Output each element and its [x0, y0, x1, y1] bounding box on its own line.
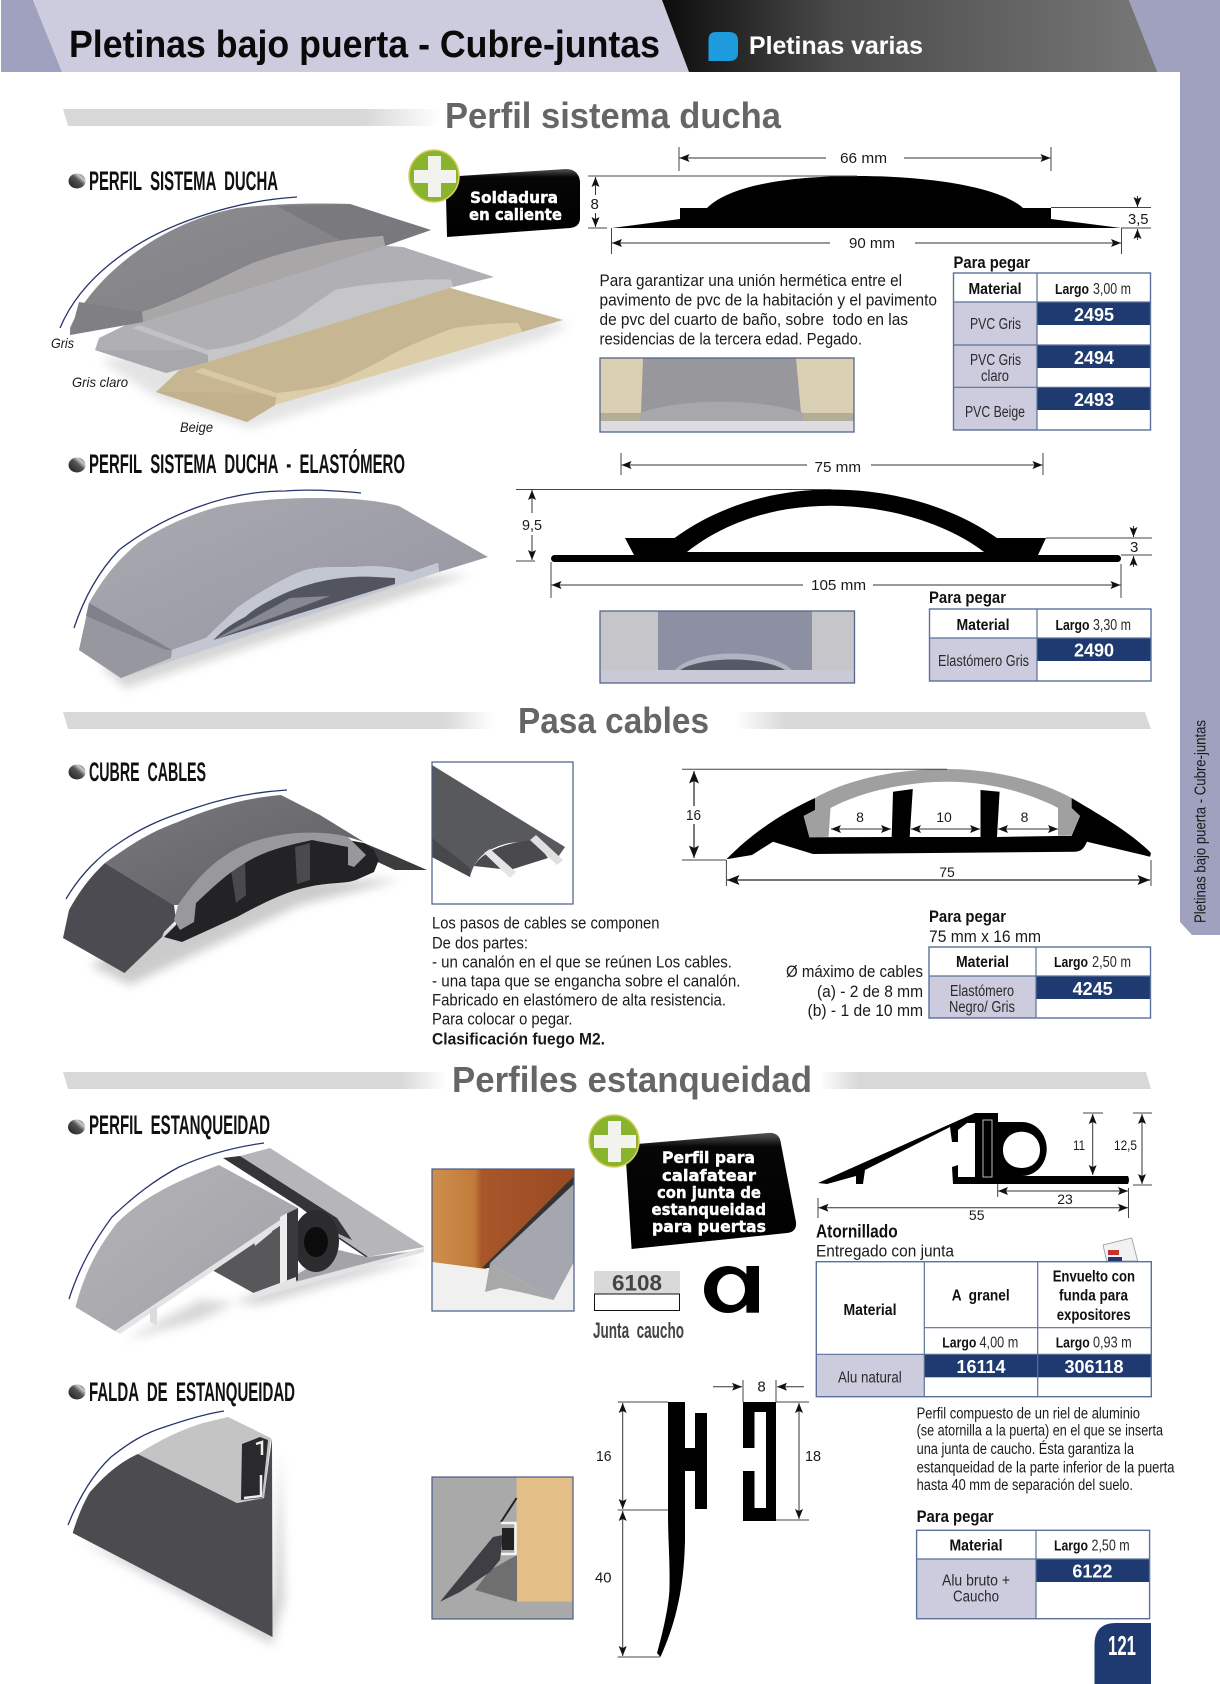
description text: estanqueidad: hasta 40 mm de separación del suelo. [917, 1477, 1133, 1494]
table: cubre cables reference: Elastómero [950, 983, 1014, 1000]
description text: cubre cables: Fabricado en elastómero de alta resistencia. [432, 992, 726, 1010]
table: cubre cables reference [929, 947, 1150, 1018]
description text: ducha: Para garantizar una unión hermética entre el [600, 272, 902, 290]
heading: Para pegar: Para pegar [929, 588, 1006, 607]
heading: Para pegar: Para pegar [917, 1507, 994, 1526]
technical drawing: ducha profile: 66 mm [840, 150, 887, 167]
table: falda reference: Material [950, 1538, 1002, 1555]
photo: ducha installed [600, 358, 854, 432]
table: falda reference: 6122 [1072, 1561, 1112, 1581]
table: cubre cables reference: Material [956, 954, 1009, 971]
main title: Pletinas bajo puerta - Cubre-juntas [69, 24, 660, 66]
section heading: Perfiles estanqueidad: Perfiles estanqueidad [452, 1059, 812, 1100]
description text: estanqueidad: Perfil compuesto de un riel de aluminio [917, 1405, 1140, 1422]
table: ducha references: PVC Gris [970, 352, 1021, 369]
section heading: Perfil sistema ducha: Perfil sistema ducha [445, 95, 782, 136]
table: perfil estanqueidad references: funda para [1059, 1288, 1128, 1305]
junta reference 6108: 6108 [612, 1271, 662, 1296]
heading: Para pegar [929, 907, 1041, 946]
table: falda reference: Caucho [953, 1589, 999, 1606]
heading: Perfil estanqueidad [68, 1110, 270, 1140]
heading: Perfil estanqueidad: PERFIL ESTANQUEIDAD [89, 1110, 270, 1140]
technical drawing: door seal profile: 55 [969, 1207, 985, 1223]
table: elastómero references: Largo [1056, 617, 1090, 634]
callout: perfil para calafatear: calafatear [662, 1166, 756, 1185]
description text: cubre cables: - una tapa que se engancha sobre el canalón. [432, 973, 740, 991]
table: perfil estanqueidad references: Envuelto con [1053, 1269, 1135, 1286]
heading: Cubre cables [68, 757, 206, 787]
technical drawing: falda profile: 18 [805, 1448, 821, 1465]
table: perfil estanqueidad references: Largo [942, 1335, 976, 1352]
technical drawing: ducha profile: 3,5 [1128, 211, 1148, 228]
product illustration: cubre cables [63, 790, 427, 985]
description text: ducha [600, 272, 937, 348]
heading: Perfil sistema ducha: PERFIL SISTEMA DUCHA [89, 166, 278, 196]
icon: junta section symbol [704, 1266, 759, 1313]
table: cubre cables reference: Largo [1054, 954, 1088, 971]
callout: soldadura en caliente [409, 150, 580, 237]
table: elastómero references: 2490 [1074, 641, 1114, 661]
table: perfil estanqueidad references: 16114 [956, 1357, 1006, 1377]
icon: blue category tab [708, 32, 738, 61]
heading: Cubre cables: CUBRE CABLES [89, 757, 206, 787]
product illustration: perfil estanqueidad [69, 1143, 425, 1340]
technical drawing: elastómero profile: 105 mm [811, 577, 866, 594]
heading: Perfil sistema ducha - elastómero [68, 448, 405, 479]
heading: Para pegar: Para pegar [929, 907, 1006, 926]
technical drawing: door seal profile: 12,5 [1114, 1137, 1137, 1153]
table: perfil estanqueidad references: 0,93 m [1093, 1335, 1132, 1352]
table: perfil estanqueidad references: Largo [1056, 1335, 1090, 1352]
category label: Pletinas varias [749, 32, 923, 60]
table: perfil estanqueidad references: 306118 [1064, 1357, 1124, 1377]
table: perfil estanqueidad references: Alu natural [838, 1370, 902, 1387]
technical drawing: cable cover profile: 8 [856, 809, 864, 825]
heading: Falda de estanqueidad: FALDA DE ESTANQUEIDAD [89, 1377, 295, 1407]
heading: Para pegar: 75 mm x 16 mm [929, 928, 1041, 946]
label: Gris claro: Gris claro [72, 374, 128, 390]
callout: soldadura en caliente: Soldadura [470, 188, 558, 207]
icon: display package [1103, 1238, 1138, 1261]
technical drawing: elastómero profile [516, 453, 1152, 598]
technical drawing: falda profile: 16 [596, 1448, 612, 1465]
description text: cubre cables: Para colocar o pegar. [432, 1010, 572, 1028]
heading: Perfil sistema ducha - elastómero: PERFIL SISTEMA DUCHA - ELASTÓMERO [89, 448, 405, 479]
table: ducha references: claro [981, 368, 1009, 385]
description text: estanqueidad: (se atornilla a la puerta) en el que se inserta [917, 1423, 1163, 1440]
product illustration: falda de estanqueidad [68, 1411, 285, 1645]
description text: cubre cables: Clasificación fuego M2. [432, 1030, 605, 1048]
label: Junta caucho: Junta caucho [593, 1318, 684, 1343]
callout: perfil para calafatear [589, 1115, 796, 1249]
technical drawing: cable cover profile: 8 [1021, 809, 1029, 825]
description text: cubre cables [432, 914, 740, 1048]
callout: perfil para calafatear: estanqueidad [652, 1200, 766, 1219]
technical drawing: door seal profile: 11 [1073, 1137, 1085, 1153]
callout: perfil para calafatear: para puertas [652, 1217, 766, 1236]
table: ducha references [954, 273, 1150, 430]
technical drawing: cable cover profile [682, 769, 1151, 886]
photo: falda installed [432, 1477, 573, 1619]
photo: elastómero installed [600, 611, 854, 683]
table: elastómero references: Material [956, 617, 1010, 634]
technical drawing: door seal profile: 23 [1057, 1191, 1073, 1207]
table: ducha references: 2493 [1074, 390, 1114, 410]
label: Beige: Beige [180, 419, 213, 435]
table: ducha references: Largo [1055, 281, 1089, 298]
label: Gris: Gris [51, 335, 74, 351]
description text: estanqueidad [917, 1405, 1175, 1494]
table: falda reference: Largo [1054, 1538, 1088, 1555]
description text: cubre cables: Los pasos de cables se componen [432, 914, 660, 932]
description text: estanqueidad: estanqueidad de la parte inferior de la puerta [917, 1459, 1175, 1476]
technical drawing: falda profile [595, 1379, 821, 1657]
heading: Atornillado [816, 1222, 955, 1261]
description text: ducha: pavimento de pvc de la habitación y el pavimento [600, 292, 937, 310]
heading: Para pegar: Para pegar [954, 253, 1030, 272]
table: cubre cables reference: 4245 [1073, 979, 1113, 999]
heading: Atornillado: Atornillado [816, 1222, 898, 1242]
product illustration: three shower profiles [60, 197, 570, 428]
description text: ducha: residencias de la tercera edad. Pegado. [600, 330, 862, 348]
page number tab: 121 [1108, 1630, 1136, 1661]
table: perfil estanqueidad references: expositores [1057, 1307, 1131, 1324]
description text: cubre cables: - un canalón en el que se reúnen Los cables. [432, 954, 732, 972]
technical drawing: ducha profile [588, 147, 1151, 254]
technical drawing: cable cover profile: 10 [936, 809, 952, 825]
technical drawing: ducha profile: 90 mm [849, 235, 895, 252]
page number tab [1094, 1623, 1151, 1684]
table: ducha references: 2494 [1074, 348, 1114, 368]
side tab: Pletinas bajo puerta - Cubre-juntas [1192, 720, 1210, 923]
table: perfil estanqueidad references: Material [844, 1302, 896, 1319]
junta reference 6108 [594, 1271, 680, 1310]
section heading: Pasa cables [63, 700, 1151, 741]
table: ducha references: Material [968, 281, 1022, 298]
technical drawing: cable cover profile: 75 [939, 864, 955, 880]
technical drawing: falda profile: 8 [757, 1379, 766, 1396]
cable diameter note: (a) - 2 de 8 mm [817, 983, 923, 1001]
section heading: Perfil sistema ducha [63, 95, 782, 136]
technical drawing: elastómero profile: 75 mm [814, 459, 861, 476]
table: ducha references: PVC Gris [970, 316, 1021, 333]
header banner [0, 0, 1220, 72]
side tab [1180, 72, 1220, 935]
cable diameter note: (b) - 1 de 10 mm [808, 1002, 923, 1020]
technical drawing: elastómero profile: 3 [1130, 539, 1138, 556]
technical drawing: ducha profile: 8 [590, 196, 599, 213]
table: falda reference [917, 1530, 1150, 1619]
table: ducha references: 2495 [1074, 305, 1114, 325]
table: perfil estanqueidad references: A granel [952, 1288, 1010, 1305]
description text: cubre cables: De dos partes: [432, 934, 528, 952]
callout: perfil para calafatear: Perfil para [662, 1148, 755, 1167]
table: falda reference: Alu bruto + [942, 1573, 1010, 1590]
table: perfil estanqueidad references: 4,00 m [980, 1335, 1018, 1352]
table: elastómero references: 3,30 m [1093, 617, 1131, 634]
technical drawing: elastómero profile: 9,5 [522, 517, 542, 534]
table: elastómero references [930, 609, 1151, 681]
technical drawing: cable cover profile: 16 [686, 808, 701, 824]
callout: soldadura en caliente: en caliente [469, 205, 562, 224]
table: cubre cables reference: Negro/ Gris [949, 999, 1015, 1016]
photo: door seal installed [432, 1169, 574, 1311]
heading: Falda de estanqueidad [68, 1377, 295, 1407]
technical drawing: falda profile: 40 [595, 1570, 612, 1587]
table: ducha references: 3,00 m [1093, 281, 1131, 298]
callout: perfil para calafatear: con junta de [657, 1183, 761, 1202]
cable diameter note: Ø máximo de cables [786, 963, 923, 981]
section heading: Pasa cables: Pasa cables [518, 700, 709, 741]
photo: cable cover detail [432, 762, 573, 904]
description text: ducha: de pvc del cuarto de baño, sobre todo en las [600, 311, 908, 329]
table: cubre cables reference: 2,50 m [1092, 954, 1131, 971]
table: falda reference: 2,50 m [1092, 1538, 1130, 1555]
table: elastómero references: Elastómero Gris [938, 653, 1029, 670]
heading: Perfil sistema ducha [68, 166, 278, 196]
table: ducha references: PVC Beige [965, 404, 1025, 421]
description text: estanqueidad: una junta de caucho. Ésta garantiza la [917, 1441, 1134, 1458]
product illustration: elastómero profile [74, 490, 488, 688]
heading: Atornillado: Entregado con junta [816, 1243, 955, 1261]
technical drawing: door seal profile [818, 1113, 1152, 1223]
cable diameter note [786, 963, 923, 1020]
section heading: Perfiles estanqueidad [63, 1059, 1151, 1100]
table: perfil estanqueidad references [816, 1262, 1151, 1397]
